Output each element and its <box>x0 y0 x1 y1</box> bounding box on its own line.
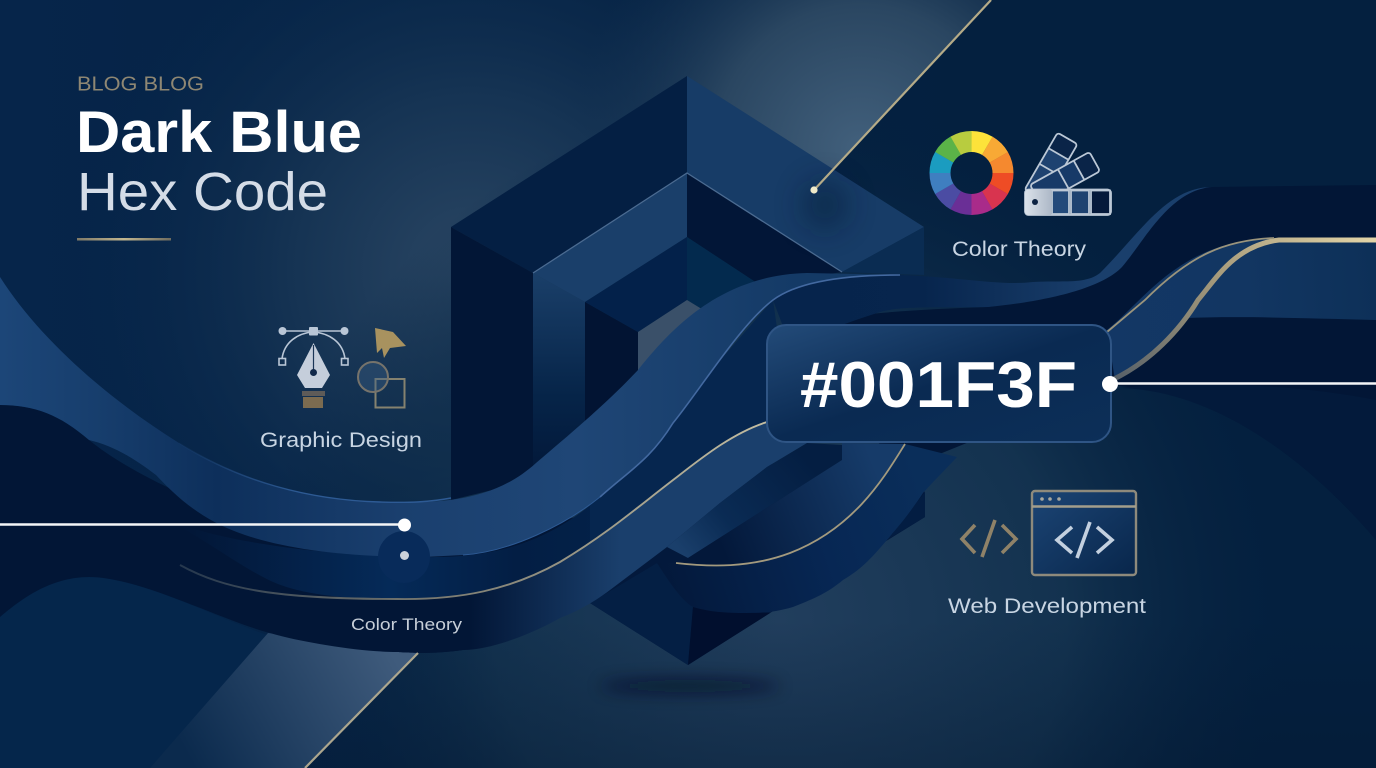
front card <box>1025 190 1111 215</box>
bezier handles <box>279 331 348 365</box>
overlapping shapes <box>376 379 404 408</box>
top left face <box>451 76 687 273</box>
main ribbon <box>0 273 900 557</box>
lower outer ribbon <box>657 444 957 613</box>
tip left facet <box>590 563 693 665</box>
pin shadow <box>801 179 849 231</box>
lower right swoosh <box>1120 384 1376 540</box>
title line one: Dark Blue <box>76 100 362 165</box>
right corner facet <box>887 492 925 540</box>
icon: browser window <box>1032 491 1136 575</box>
gold diagonal bottom <box>305 653 418 768</box>
hex code badge <box>767 325 1111 442</box>
bottom left panel <box>0 577 268 768</box>
back window <box>638 300 705 385</box>
hexagonal 3D block <box>451 76 925 665</box>
lit box <box>667 443 842 558</box>
inner recess <box>585 302 638 470</box>
hex code value: #001F3F <box>800 348 1077 421</box>
cursor arrow <box>375 328 406 358</box>
icon: code brackets <box>962 520 1016 557</box>
gold curve long <box>180 422 767 599</box>
middle card <box>1030 152 1100 204</box>
gold framed band <box>677 443 905 566</box>
top diagonal light band <box>520 0 992 192</box>
floor shadow <box>600 679 780 693</box>
tip right facet <box>688 607 770 665</box>
bottom lit ribbon <box>397 422 807 653</box>
gold ribbon lines right <box>1107 238 1376 380</box>
dark band right <box>790 185 1376 470</box>
right rim <box>842 227 924 275</box>
recess back right <box>687 237 760 310</box>
connector left <box>0 518 411 532</box>
dark ribbon lower left <box>0 405 640 653</box>
recess back left <box>585 237 687 332</box>
bottom diagonal light band <box>150 633 420 768</box>
title rule <box>77 238 171 240</box>
label: color theory lower: Color Theory <box>351 615 463 634</box>
pen nib <box>297 343 330 388</box>
gap fill between ribbons <box>590 300 790 545</box>
label: web development: Web Development <box>948 595 1146 618</box>
gold curve lower <box>676 444 905 566</box>
icon: swatch fan <box>1025 133 1111 215</box>
arch ribbon <box>773 187 1212 345</box>
connector right <box>1102 376 1376 392</box>
small marker <box>378 531 430 583</box>
main ribbon highlight edges <box>179 275 900 555</box>
code glyph <box>1057 522 1112 558</box>
eyebrow: BLOG BLOG <box>77 74 204 96</box>
lower backing <box>590 445 925 665</box>
gold pin line top <box>810 0 991 194</box>
back card <box>1025 133 1077 201</box>
title line two: Hex Code <box>77 162 328 222</box>
left wall <box>451 227 533 500</box>
icon: graphic design <box>278 327 406 408</box>
top right face <box>687 76 924 272</box>
label: color theory upper: Color Theory <box>952 238 1087 261</box>
inner dark wall <box>687 173 842 285</box>
right lit ribbon <box>1107 238 1376 380</box>
mid ribbon under main <box>156 497 610 599</box>
inner lit ledge <box>533 173 687 302</box>
inner pillar <box>533 273 585 480</box>
icon: color wheel <box>928 130 1015 216</box>
label: graphic design: Graphic Design <box>260 429 422 452</box>
inner edge highlight <box>533 173 842 273</box>
